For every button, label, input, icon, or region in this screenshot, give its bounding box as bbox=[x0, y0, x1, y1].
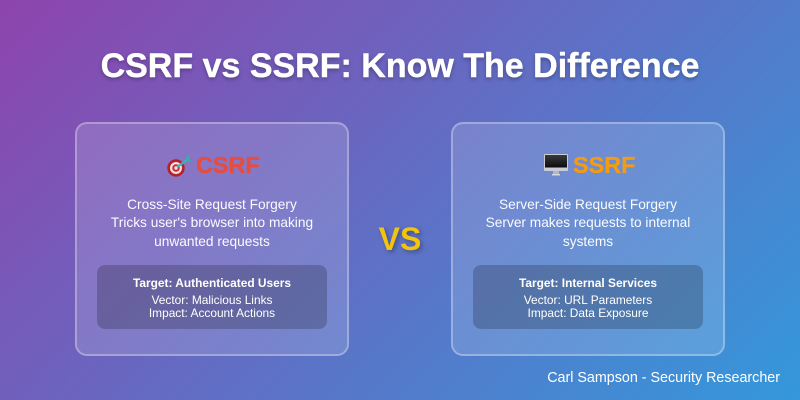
description: CSRF: unwanted requests bbox=[154, 234, 270, 249]
vs label: VS bbox=[379, 221, 421, 257]
vector and impact lines bbox=[149, 293, 275, 320]
vector and impact lines: Impact: Data Exposure bbox=[528, 306, 648, 320]
vector and impact lines: Vector: URL Parameters bbox=[524, 293, 652, 307]
title: CSRF vs SSRF: Know The Difference bbox=[101, 47, 699, 85]
details box: SSRF bbox=[473, 265, 703, 329]
panel: SSRF bbox=[451, 122, 725, 356]
description: SSRF: Server makes requests to internal bbox=[486, 215, 690, 230]
heading: SSRF: SSRF bbox=[573, 152, 635, 178]
description: CSRF: Cross-Site Request Forgery bbox=[127, 197, 297, 212]
description: SSRF: Server-Side Request Forgery bbox=[499, 197, 677, 212]
target line: Target: Authenticated Users bbox=[133, 276, 291, 290]
vector and impact lines: Vector: Malicious Links bbox=[152, 293, 272, 307]
description: CSRF: Tricks user's browser into making bbox=[111, 215, 313, 230]
target line: Target: Internal Services bbox=[519, 276, 657, 290]
vector and impact lines: Impact: Account Actions bbox=[149, 306, 275, 320]
panel: CSRF bbox=[75, 122, 349, 356]
description: CSRF bbox=[111, 197, 313, 249]
icon: dart target bbox=[167, 155, 192, 177]
heading: CSRF: CSRF bbox=[196, 152, 260, 178]
description: SSRF bbox=[486, 197, 690, 249]
description: SSRF: systems bbox=[563, 234, 613, 249]
vector and impact lines bbox=[524, 293, 652, 320]
attribution: Carl Sampson - Security Researcher bbox=[547, 370, 780, 386]
icon: desktop computer bbox=[544, 154, 568, 176]
details box: CSRF bbox=[97, 265, 327, 329]
